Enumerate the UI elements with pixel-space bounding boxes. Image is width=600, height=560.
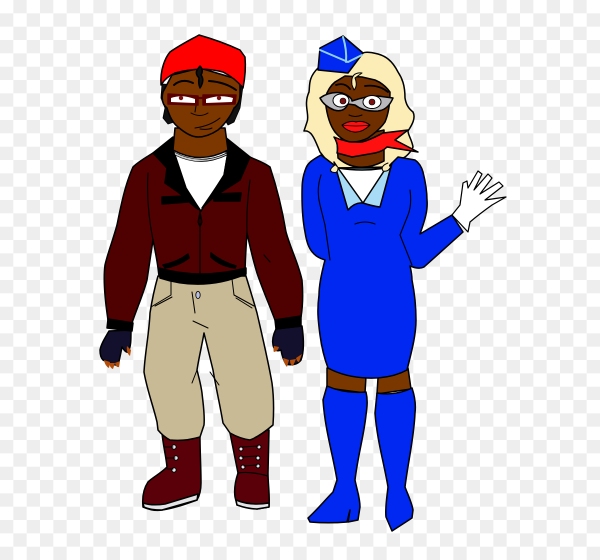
head — [162, 68, 240, 137]
fringe — [352, 73, 362, 90]
pockets — [163, 253, 236, 268]
seams and zip — [148, 173, 270, 277]
boot: woman's right — [375, 388, 415, 531]
neck — [173, 128, 228, 158]
scarf — [334, 130, 418, 157]
shirt — [172, 150, 228, 211]
jacket — [104, 153, 303, 331]
cuff: left — [107, 319, 133, 331]
garrison cap — [318, 36, 363, 73]
glasses — [320, 93, 393, 111]
eyebrows — [336, 84, 388, 92]
dress top: collar and white inset — [334, 162, 392, 210]
cap — [161, 35, 245, 88]
dress — [302, 155, 463, 378]
neck — [337, 130, 384, 167]
thighs — [327, 368, 411, 394]
boot: man's left — [143, 433, 201, 510]
forelock — [196, 66, 203, 88]
waving glove — [452, 171, 506, 232]
boot: man's right — [230, 430, 269, 509]
figure: woman in blue uniform — [302, 36, 506, 531]
trousers — [144, 273, 274, 440]
hand: man's left glove — [100, 330, 131, 369]
head — [320, 73, 393, 142]
hair — [161, 84, 243, 125]
cuff: right — [275, 316, 301, 329]
boot: woman's left — [308, 386, 367, 523]
glasses — [168, 94, 236, 105]
waistband — [159, 268, 246, 284]
eyebrows and face lines — [174, 81, 236, 90]
nose and lips — [349, 115, 362, 116]
hand: man's right glove — [273, 326, 303, 367]
hair — [304, 52, 414, 172]
jacket collar — [153, 137, 250, 210]
figure: man in jacket — [100, 35, 303, 510]
curls — [331, 163, 390, 172]
